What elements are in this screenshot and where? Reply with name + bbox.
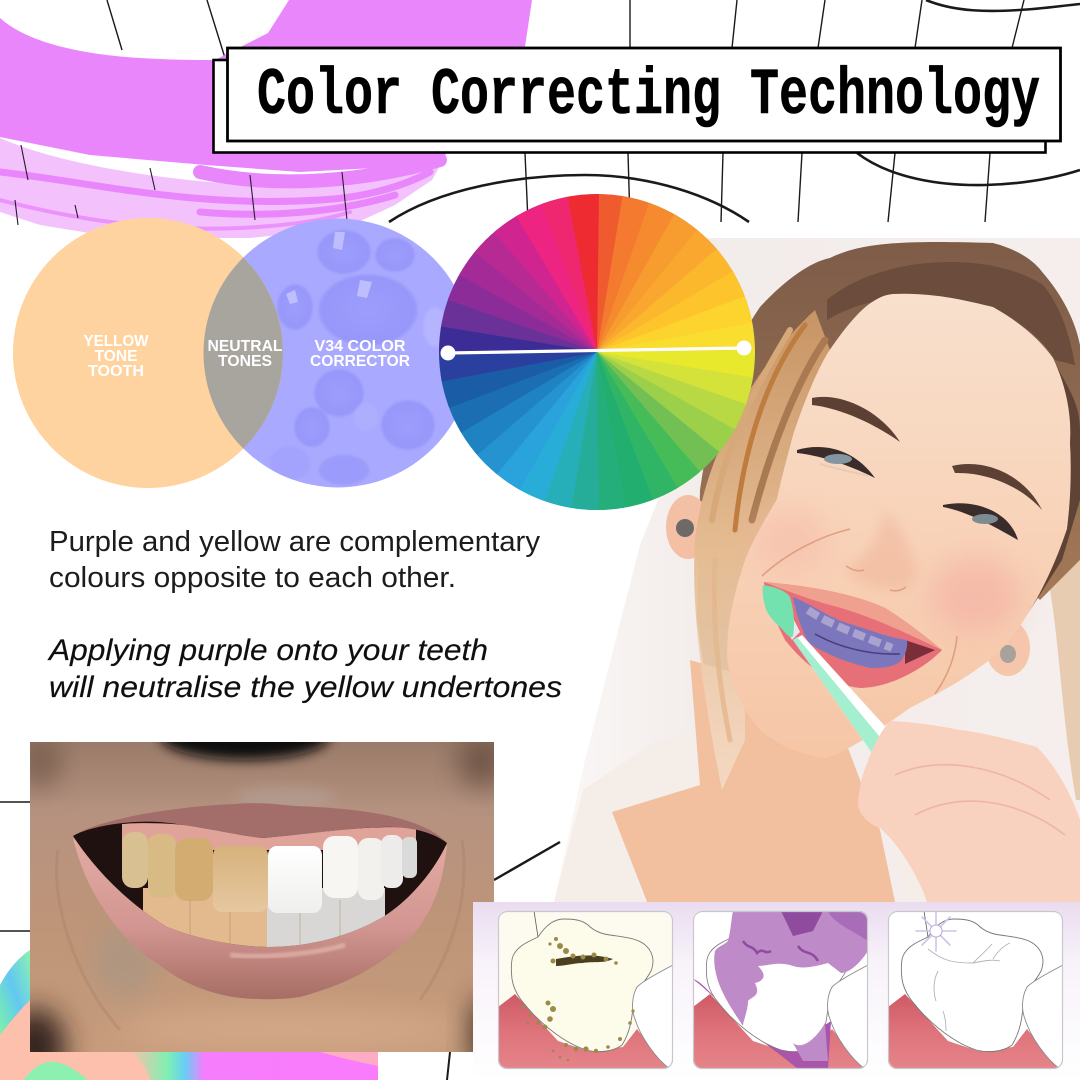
label: yellow tone tooth [84,333,149,380]
lips [764,582,942,688]
back hair [697,242,1080,671]
eyebrow left [812,397,900,442]
hand [858,721,1080,902]
ear gauge right [1000,645,1016,663]
nose shadow [852,518,914,589]
toothbrush [763,585,892,753]
card: purple cleansing foam [693,911,868,1069]
orange hair streaks [712,325,825,740]
skin [30,742,494,1052]
emphasis text: will neutralise the yellow undertones [49,671,562,704]
label: yellow tone tooth: YELLOW [84,333,149,350]
label: V34 color corrector [310,338,410,370]
eye left [797,447,875,478]
bathrobe [554,756,635,902]
photo: half whitened smile [30,742,494,1052]
label: yellow tone tooth: TONE [94,348,138,365]
photo: woman brushing teeth with purple paste [550,238,1080,902]
gums [122,823,416,850]
eye right [943,503,1018,540]
upper lip [73,803,447,843]
teeth [122,823,417,950]
mouth interior [73,822,447,947]
label: yellow tone tooth: TOOTH [88,363,144,380]
explanation text: colours opposite to each other. [49,562,456,594]
title box [214,48,1060,152]
face [727,294,1071,758]
label: neutral tones: NEUTRAL [208,338,283,355]
eyebrow right [952,464,1042,510]
lower stray lines [0,802,560,1080]
emphasis text [47,634,562,704]
overlap: neutral tones [204,258,283,448]
finger creases [895,765,1065,835]
smile creases [57,840,464,1030]
lighter chin [156,1013,424,1046]
card: plaque on tooth [498,911,673,1069]
label: neutral tones [208,338,283,370]
stubble shading [93,920,157,1000]
pink brush stroke [0,0,532,238]
cheek blush [930,557,1020,633]
emphasis text: Applying purple onto your teeth [47,634,488,667]
tooth gaps [190,900,340,945]
card: clean sparkling tooth [888,911,1063,1069]
plaque deposits [521,937,635,1061]
lower teeth yellow [143,888,267,950]
yellow teeth upper [122,832,148,888]
ear right [988,625,1030,676]
purple teeth [793,597,907,668]
sparkle [916,911,956,951]
ear left [666,495,702,559]
right dark hair [1027,358,1080,615]
lower teeth white [267,888,385,950]
complementary axis line [440,340,752,360]
right side thin blond hair [1050,560,1080,800]
circle: yellow tone tooth [13,218,283,488]
explanation text [49,526,541,594]
ear gauge left [676,519,694,537]
label: V34 color corrector: V34 COLOR [314,338,406,355]
white teeth upper [268,846,322,913]
nostrils and smile creases [762,529,957,694]
circle: V34 color corrector [244,218,454,488]
lip highlight [230,945,345,956]
tooth cleaning strip [473,902,1080,1080]
blond strands left [694,310,830,790]
gradient blob bottom left [0,950,378,1080]
photo background [550,238,1080,902]
corner shadows [30,988,86,1052]
grid lines upper [107,0,1080,222]
lower lip [73,838,447,999]
label: neutral tones: TONES [218,353,272,370]
neck and chest [612,660,895,902]
explanation text: Purple and yellow are complementary [49,526,541,558]
hair top band dark [827,262,1075,365]
philtrum highlight [240,786,330,806]
venn diagram [13,218,472,488]
label: V34 color corrector: CORRECTOR [310,353,410,370]
nose shadow [154,742,336,770]
dark mouth gap [905,640,935,664]
color wheel [439,194,755,510]
